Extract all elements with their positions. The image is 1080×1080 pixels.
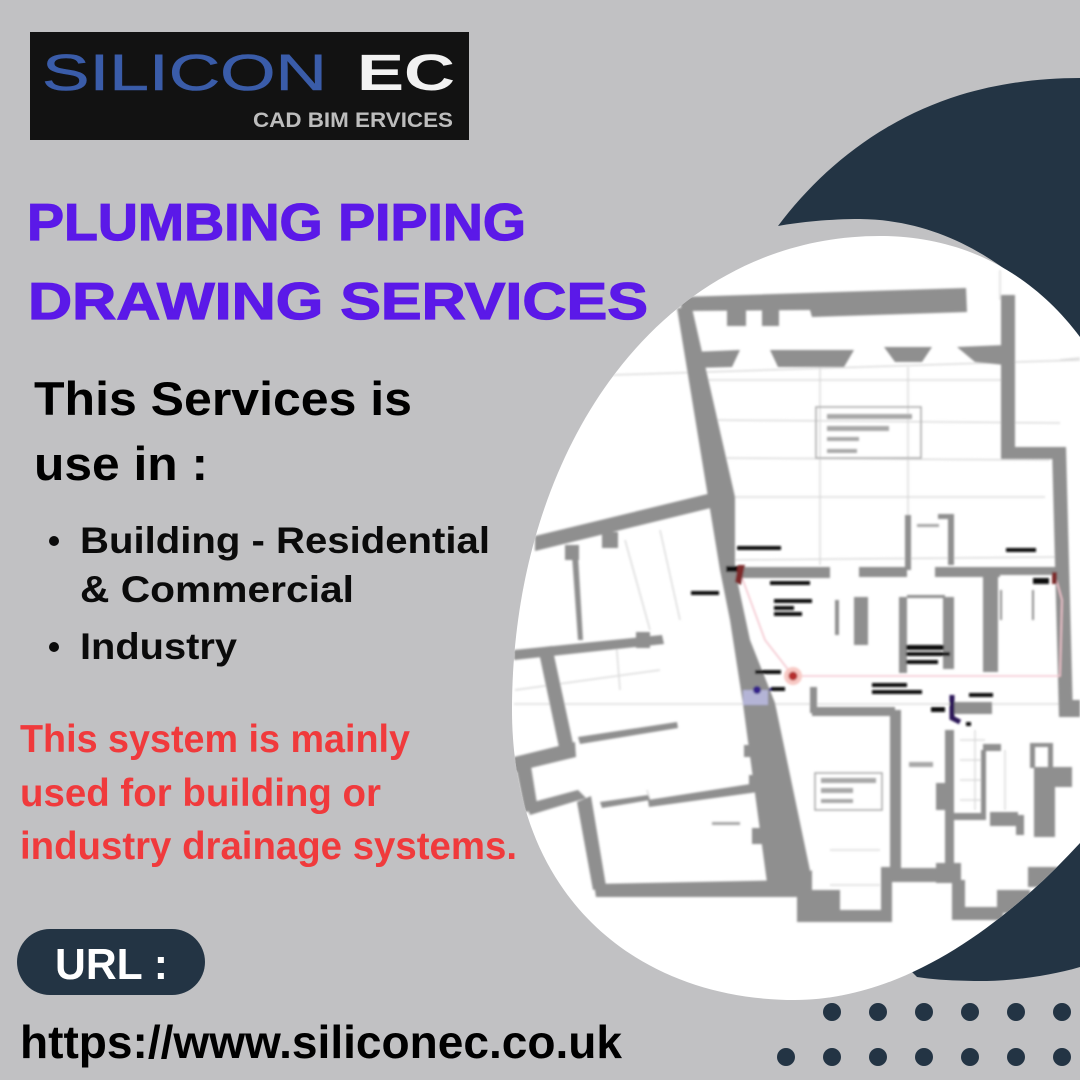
subheading: use in :	[34, 437, 208, 490]
decorative navy shape: bottom right	[900, 820, 1080, 981]
title	[27, 194, 648, 331]
red description: industry drainage systems.	[20, 825, 517, 868]
dot pattern	[777, 1003, 1071, 1066]
title: DRAWING SERVICES	[28, 273, 648, 331]
logo: EC	[357, 44, 455, 101]
subheading	[34, 372, 412, 490]
decorative navy shape: top right	[778, 78, 1080, 340]
URL pill: URL :	[55, 940, 168, 989]
black annotations	[691, 546, 1049, 726]
bullet list: Industry	[80, 626, 237, 667]
red description: used for building or	[20, 772, 381, 815]
website address: https://www.siliconec.co.uk	[20, 1016, 622, 1068]
title: PLUMBING PIPING	[27, 194, 526, 252]
pipe fittings	[743, 690, 768, 705]
thin drawing lines	[514, 270, 1080, 885]
subheading: This Services is	[34, 372, 412, 425]
walls	[514, 288, 1080, 922]
red description	[20, 718, 517, 868]
URL pill	[17, 929, 205, 995]
red description: This system is mainly	[20, 718, 410, 761]
logo: SILICON	[42, 44, 327, 101]
floor plan drawing	[514, 270, 1080, 922]
pipe run	[741, 575, 1062, 676]
white blob with floor plan	[500, 230, 1080, 1005]
bullet list	[49, 520, 490, 667]
logo: CAD BIM ERVICES	[253, 109, 453, 132]
logo	[30, 32, 469, 140]
bullet list: Building - Residential	[80, 520, 490, 561]
bullet list: & Commercial	[80, 569, 354, 610]
room label boxes	[815, 407, 921, 810]
